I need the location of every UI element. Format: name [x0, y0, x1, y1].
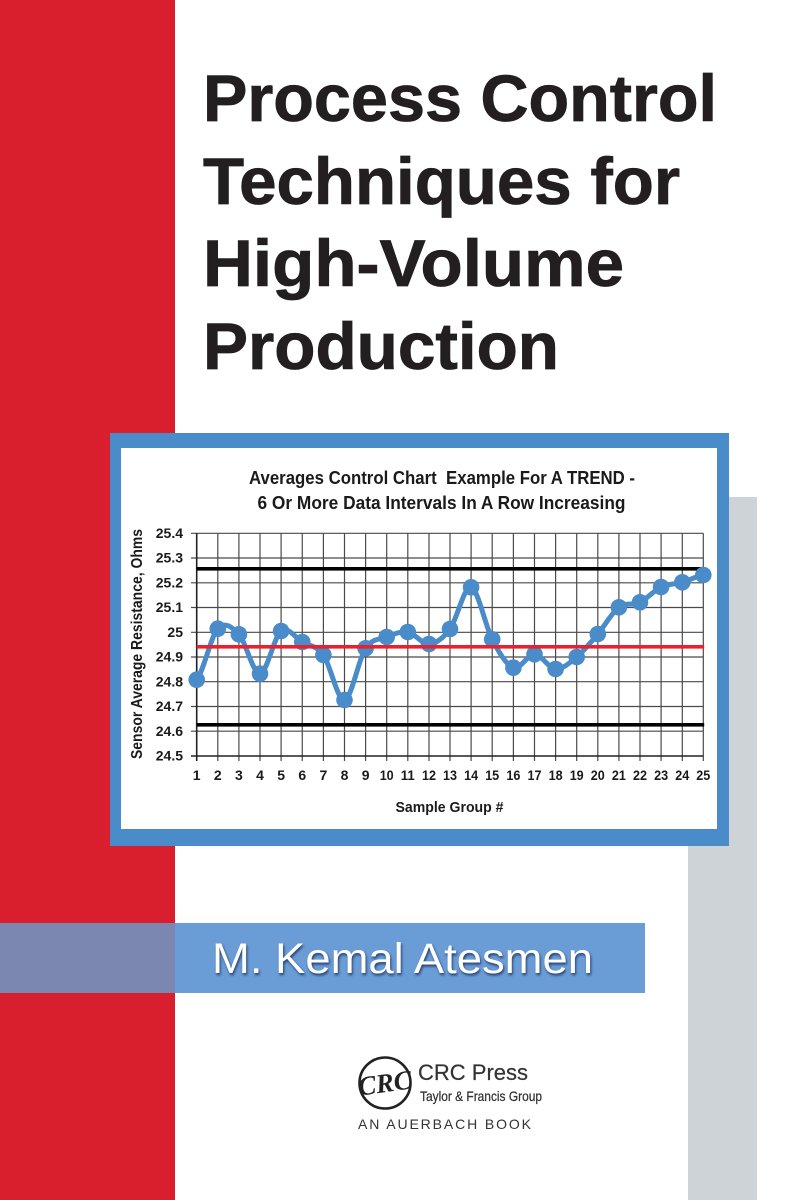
x axis labels: 5 — [277, 767, 285, 783]
panel: grey right band — [688, 497, 757, 1200]
imprint line: AN AUERBACH BOOK — [358, 1116, 532, 1132]
upper control limit — [197, 567, 704, 571]
x axis labels: 4 — [256, 767, 264, 783]
x axis labels: 1 — [193, 767, 201, 783]
x axis labels: 22 — [633, 767, 647, 783]
author bar — [0, 923, 645, 993]
title: High-Volume — [203, 226, 624, 300]
control chart — [129, 525, 712, 816]
x axis labels: 16 — [506, 767, 521, 783]
panel: chart frame — [110, 433, 729, 846]
y axis labels: 25.1 — [156, 599, 183, 615]
y axis labels: 24.6 — [156, 723, 183, 739]
publisher group: Taylor & Francis Group — [420, 1088, 542, 1104]
y axis labels: 24.9 — [156, 649, 183, 665]
x axis labels: 7 — [320, 767, 328, 783]
title: Techniques for — [203, 144, 680, 218]
y axis labels: 25.2 — [156, 574, 183, 590]
x axis labels: 3 — [235, 767, 243, 783]
y axis labels: 24.7 — [156, 698, 183, 714]
mean line — [197, 645, 704, 649]
chart title: 6 Or More Data Intervals In A Row Increasing — [258, 493, 626, 513]
chart title: Averages Control Chart Example For A TREND - — [249, 468, 635, 488]
x axis labels: 20 — [591, 767, 605, 783]
lower control limit — [197, 723, 704, 727]
x axis labels: 17 — [528, 767, 542, 783]
icon: CRC circle: CRC — [356, 1064, 415, 1102]
x axis labels: 18 — [549, 767, 563, 783]
x axis labels: 6 — [298, 767, 306, 783]
x axis labels: 21 — [612, 767, 626, 783]
x axis labels: 19 — [570, 767, 584, 783]
y axis labels: 24.5 — [156, 748, 183, 764]
x axis title: Sample Group # — [396, 799, 504, 816]
publisher logo — [356, 1058, 542, 1132]
publisher name: CRC Press — [418, 1060, 528, 1085]
author name: M. Kemal Atesmen — [212, 935, 593, 983]
title: Process Control — [203, 61, 717, 135]
x axis labels: 15 — [485, 767, 499, 783]
x axis labels — [193, 767, 710, 783]
x axis labels: 9 — [362, 767, 370, 783]
x axis labels: 24 — [675, 767, 689, 783]
chart title — [249, 468, 635, 513]
data points — [188, 567, 712, 708]
y axis labels: 24.8 — [156, 673, 183, 689]
y axis labels — [156, 525, 183, 764]
x axis labels: 12 — [422, 767, 436, 783]
x axis labels: 25 — [696, 767, 710, 783]
y axis labels: 25.3 — [156, 550, 183, 566]
x axis labels: 2 — [214, 767, 222, 783]
x axis labels: 23 — [654, 767, 668, 783]
y axis title: Sensor Average Resistance, Ohms — [129, 529, 146, 759]
x axis labels: 13 — [443, 767, 457, 783]
title — [203, 61, 717, 383]
y axis labels: 25 — [167, 624, 183, 640]
x axis labels: 14 — [464, 767, 478, 783]
panel: red left band — [0, 0, 175, 1200]
x axis labels: 8 — [341, 767, 349, 783]
data line — [197, 575, 703, 700]
y axis labels: 25.4 — [156, 525, 183, 541]
title: Production — [203, 309, 559, 383]
x axis labels: 11 — [401, 767, 415, 783]
x axis labels: 10 — [380, 767, 394, 783]
